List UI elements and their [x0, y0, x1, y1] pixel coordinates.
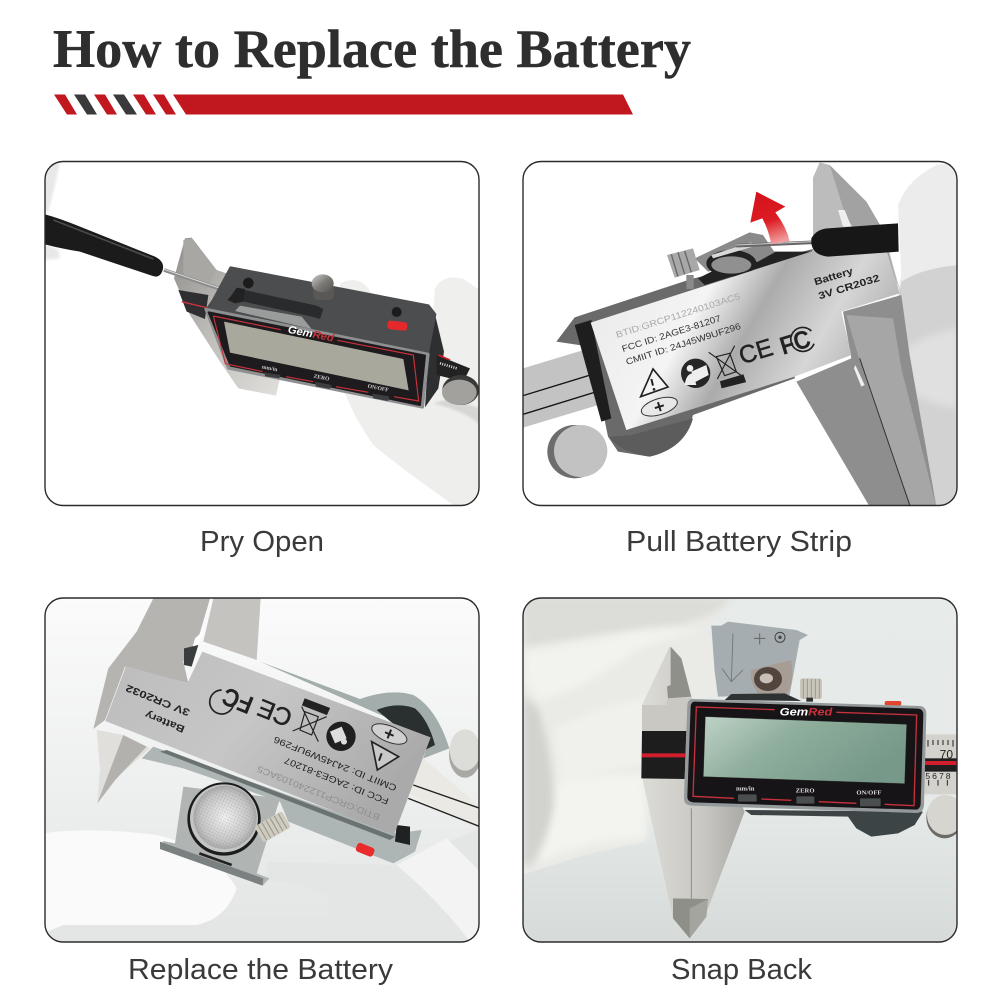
plate text: 3V CR2032	[817, 273, 882, 302]
glove: top-left fingers	[46, 163, 60, 260]
thumbwheel	[437, 355, 479, 405]
LCD front face: mm/in	[736, 785, 755, 792]
door knob	[667, 248, 700, 289]
glove: right hand	[340, 277, 480, 507]
icon: CE mark: CE	[736, 334, 776, 370]
plate text: Battery	[813, 266, 855, 288]
beam	[408, 758, 478, 827]
panel: pry open	[43, 162, 480, 507]
plate text: FCC ID: 2AGE3-81207	[283, 755, 390, 806]
coin cell	[187, 782, 261, 856]
icon: warning triangle	[641, 369, 668, 397]
plate text: CMIIT ID: 24J45W9UF296	[625, 321, 742, 367]
door knob	[800, 678, 822, 702]
battery door	[695, 232, 775, 277]
thumbwheel	[449, 729, 481, 778]
caption: replace the battery: Replace the Battery	[128, 954, 394, 986]
thumbwheel	[926, 795, 964, 838]
icon: battery cell	[640, 396, 678, 417]
LCD front face: GemRed	[780, 707, 834, 719]
screwdriver	[736, 223, 899, 257]
LCD front face	[684, 699, 926, 813]
battery tray	[160, 787, 280, 886]
red button	[355, 842, 375, 857]
LCD front face: ON/OFF	[367, 384, 390, 394]
thumbwheel	[547, 425, 607, 478]
battery door	[711, 622, 808, 697]
LCD front face: mm/in	[261, 364, 279, 373]
icon: FCC mark: FC	[777, 325, 814, 361]
caption: snap back: Snap Back	[671, 954, 812, 986]
plate text: FCC ID: 2AGE3-81207	[621, 313, 722, 354]
scale: 70	[940, 747, 953, 761]
label plate	[591, 242, 900, 430]
icon: FCC mark: FC	[218, 681, 257, 719]
screwdriver	[46, 214, 219, 290]
label plate	[105, 652, 431, 835]
panel: snap back	[521, 597, 964, 942]
scale	[923, 734, 960, 794]
thumb knob	[312, 274, 334, 300]
glove: lower-right hand	[397, 839, 478, 940]
icon: CE mark: CE	[254, 693, 296, 731]
panel: pull battery strip	[523, 162, 958, 507]
arrow: pull up	[750, 192, 790, 244]
icon: FCC mark	[779, 326, 815, 354]
panel: replace the battery	[43, 598, 481, 945]
LCD front face: GemRed	[287, 324, 335, 345]
lower jaw	[796, 295, 936, 507]
fixed jaw	[174, 238, 280, 396]
LCD front face: ON/OFF	[856, 790, 881, 797]
icon: read manual	[326, 722, 356, 751]
plate text: BTID:GRCP112240103AC5	[256, 764, 381, 822]
title underline stripes	[54, 94, 633, 114]
icon: read manual	[681, 359, 710, 388]
plate text	[124, 681, 398, 822]
plate text: 3V CR2032	[124, 681, 192, 717]
glove: lower-left finger	[43, 830, 237, 933]
icon: crossed-out bin	[709, 346, 745, 388]
caption: pry open: Pry Open	[200, 526, 324, 558]
caption: pull battery strip: Pull Battery Strip	[626, 526, 852, 558]
scale: 5678	[925, 771, 953, 781]
LCD front face	[206, 309, 428, 407]
icon: warning triangle	[372, 742, 399, 770]
caliper housing	[556, 249, 813, 457]
caliper housing underside	[725, 693, 923, 837]
icon: crossed-out bin	[293, 699, 329, 742]
door knob	[256, 812, 290, 842]
jaws	[93, 598, 261, 803]
upper jaw	[813, 162, 901, 295]
plate text: BTID:GRCP112240103AC5	[615, 291, 742, 340]
coin cell	[750, 660, 792, 695]
caliper housing	[142, 662, 449, 863]
title: How to Replace the Battery	[53, 19, 691, 79]
plate text: CMIIT ID: 24J45W9UF296	[272, 734, 398, 793]
beam	[524, 350, 597, 428]
plate text	[615, 266, 882, 367]
LCD front face: ZERO	[796, 787, 815, 794]
icon: battery cell	[369, 720, 410, 748]
glove: holding hand	[521, 597, 731, 875]
plate text: Battery	[143, 708, 186, 734]
glove	[898, 164, 956, 505]
LCD front face: ZERO	[313, 374, 330, 383]
jaw	[641, 647, 745, 938]
caliper body top face	[207, 268, 444, 407]
